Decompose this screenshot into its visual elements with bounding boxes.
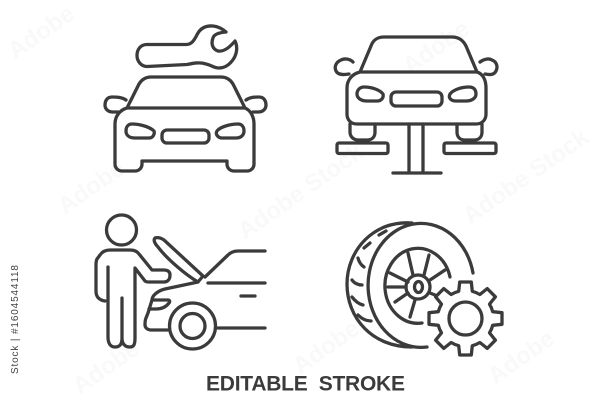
background watermark: Adobe Stock (458, 123, 594, 230)
lift platforms (337, 143, 388, 154)
background watermark: Adobe Stock (233, 138, 369, 245)
tread (352, 231, 386, 321)
headlight (149, 300, 170, 309)
spokes (388, 253, 445, 317)
wheels (350, 124, 375, 140)
caption: EDITABLE STROKE (206, 372, 405, 396)
car body (115, 77, 254, 171)
open hood (154, 238, 203, 282)
mechanic (106, 215, 136, 245)
icon: mechanic with open hood car (96, 215, 265, 349)
background watermark: Adobe (3, 0, 80, 65)
gear (429, 282, 502, 355)
hub (406, 275, 430, 299)
left mirror (105, 97, 126, 112)
background watermark: Adobe (53, 155, 130, 220)
icon: tire with gear (347, 223, 502, 355)
background watermark: Adobe (483, 325, 560, 390)
rim (385, 248, 450, 323)
stock id: Stock | #1604544118 (10, 265, 21, 374)
right mirror (246, 97, 266, 112)
tire (347, 223, 473, 347)
icon: car on lift (335, 37, 497, 173)
wrench (137, 26, 237, 68)
wheel (170, 303, 216, 349)
right mirror (480, 59, 497, 75)
headlights and grille (357, 87, 383, 101)
background watermark: Adobe (398, 15, 475, 80)
gear centre (449, 302, 482, 335)
lift post (393, 124, 441, 173)
background watermark: Adobe (68, 335, 145, 400)
car outline (145, 251, 265, 330)
background watermark: Adobe (288, 315, 365, 380)
headlights and grille (126, 124, 154, 138)
left mirror (335, 59, 353, 75)
car body (347, 37, 486, 124)
icon: car with wrench (105, 26, 266, 171)
